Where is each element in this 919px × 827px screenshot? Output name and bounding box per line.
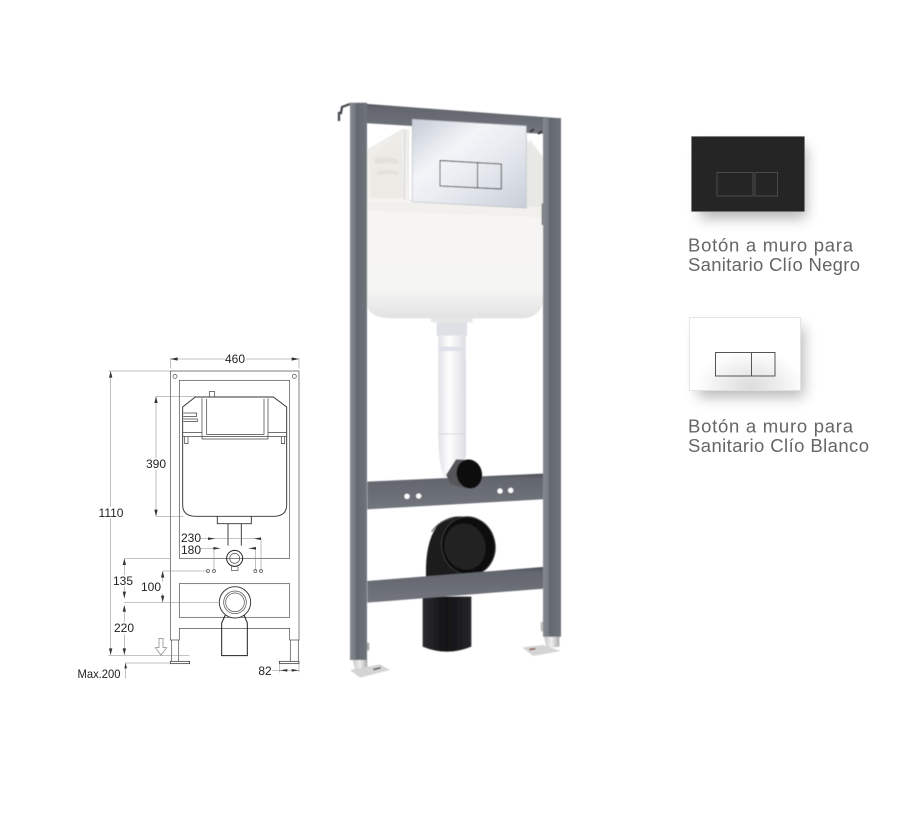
product photo: installation frame xyxy=(339,103,561,678)
dimension labels: 135 xyxy=(113,574,133,588)
technical drawing xyxy=(78,352,299,681)
caption: black button: Sanitario Clío Negro xyxy=(688,254,860,275)
drawing: frame outlines xyxy=(155,371,299,664)
crossbars xyxy=(367,473,547,603)
black plate xyxy=(692,136,804,212)
button shadow xyxy=(700,146,806,218)
panel: white button xyxy=(690,318,804,397)
dimension labels: 460 xyxy=(225,352,245,366)
button shadow xyxy=(698,327,804,397)
caption: black button: Botón a muro para xyxy=(688,234,854,256)
caption: white button: Sanitario Clío Blanco xyxy=(688,435,869,456)
white flush pipe xyxy=(438,360,466,485)
dimension labels: 220 xyxy=(114,621,134,635)
white plate xyxy=(690,318,800,390)
chrome flush plate xyxy=(412,119,526,208)
cistern tank xyxy=(367,130,547,318)
dimension labels: 82 xyxy=(258,664,272,678)
dimension labels: 180 xyxy=(181,543,201,557)
dimension labels xyxy=(78,352,272,681)
frame posts and top beam xyxy=(339,103,561,660)
dimension arrows xyxy=(109,357,299,672)
white plate buttons xyxy=(716,352,775,376)
black waste pipe xyxy=(423,511,502,652)
dimension labels: 1110 xyxy=(99,506,124,520)
caption: white button: Botón a muro para xyxy=(688,416,854,436)
metal feet xyxy=(350,622,561,678)
dimension labels: 100 xyxy=(141,580,161,594)
pipe outlet elbow xyxy=(446,457,485,491)
panel: black button xyxy=(692,136,806,218)
dimension labels: 390 xyxy=(146,457,166,471)
black plate buttons xyxy=(717,172,778,196)
dimension labels: Max.200 xyxy=(78,667,121,681)
pipe collar xyxy=(431,318,473,394)
dimension labels: 230 xyxy=(181,531,201,545)
drawing: dimension lines xyxy=(108,358,299,678)
